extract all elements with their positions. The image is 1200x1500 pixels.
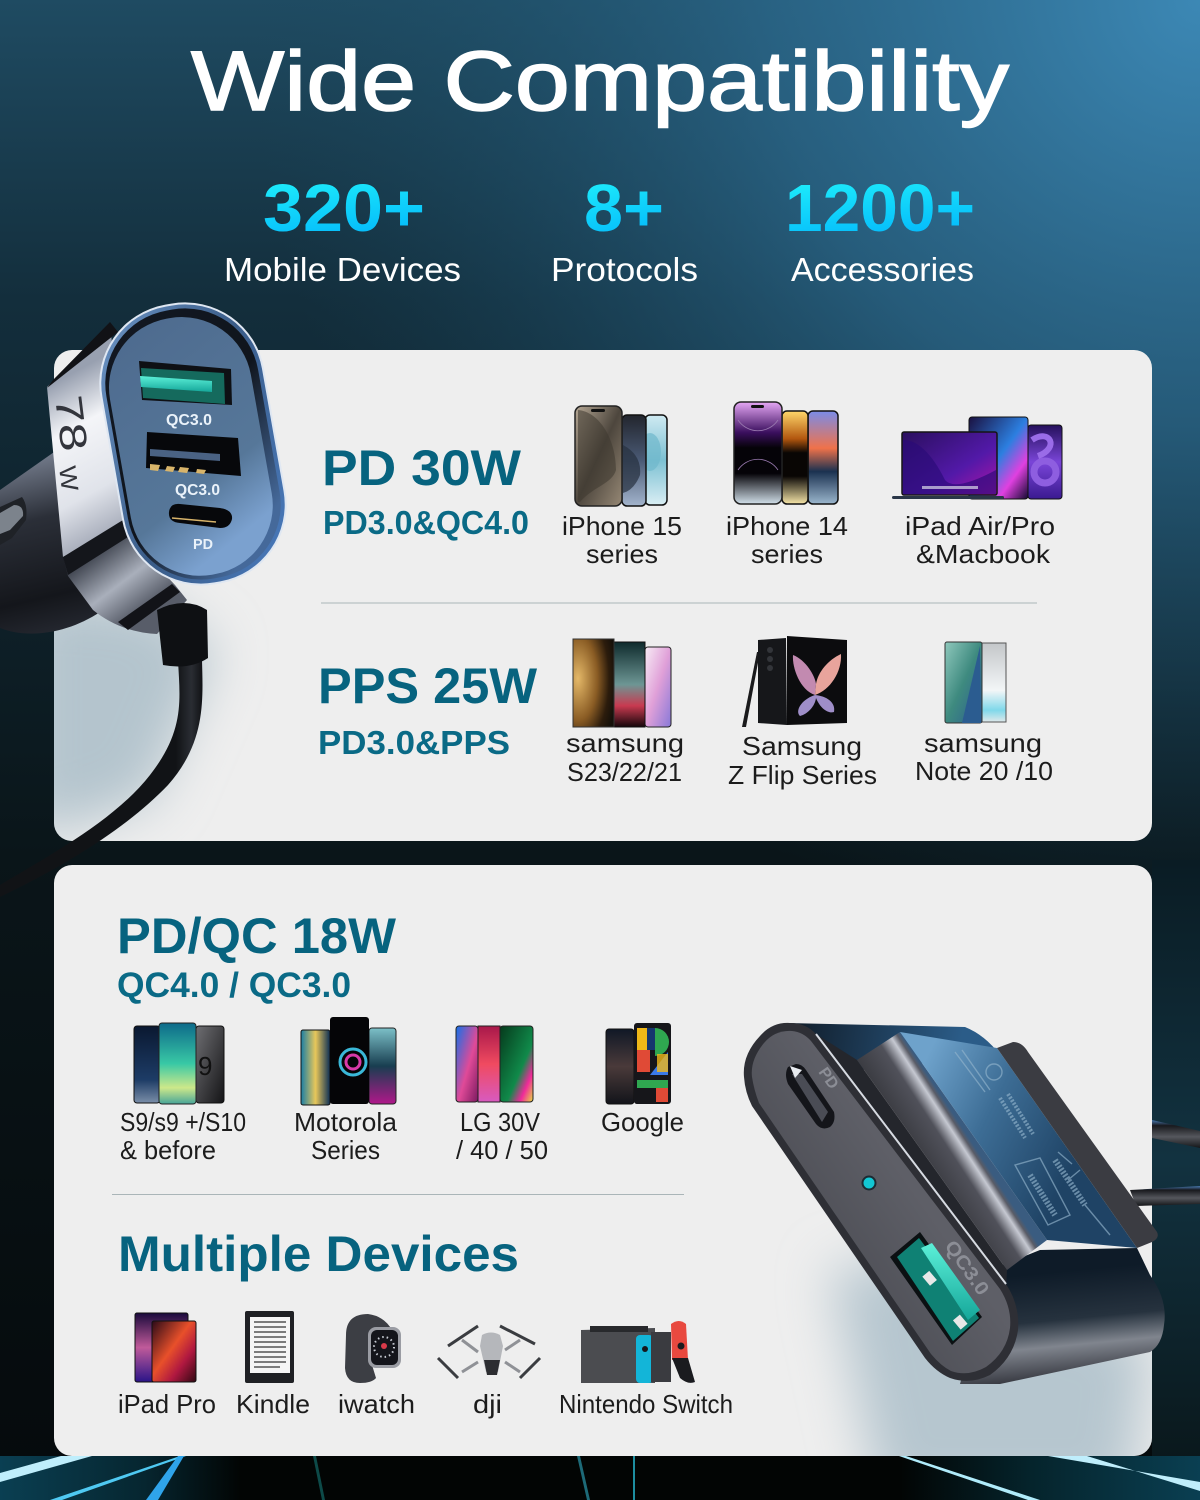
charger face: [87, 290, 299, 598]
device: Nintendo Switch: [559, 1321, 733, 1419]
charger wattage mark: 78: [46, 393, 95, 454]
device: iPad and Macbook: &Macbook: [916, 539, 1051, 569]
heading: PPS 25W: PPS 25W: [318, 658, 538, 714]
port: QC3.0 teal: [139, 361, 232, 429]
device: samsung Note 20 / 10: [915, 642, 1053, 786]
device: Google Pixel: [601, 1023, 684, 1137]
device: Kindle: Kindle: [236, 1389, 310, 1419]
device: iPad Pro: [118, 1313, 216, 1419]
cables: hub lead: [1130, 1120, 1200, 1206]
heading: PD 30W: PD3.0&QC4.0: [323, 504, 529, 541]
port: QC3.0 dark: [146, 432, 241, 499]
stat: protocols: 8+: [584, 171, 664, 246]
device: Samsung Z Flip Series: Z Flip Series: [728, 760, 877, 790]
device: iPad and Macbook: [892, 417, 1062, 569]
heading: PPS 25W: PD3.0&PPS: [318, 724, 510, 761]
heading: PD 30W: PD 30W: [322, 440, 522, 496]
heading: PD/QC 18W: PD/QC 18W: [117, 908, 397, 964]
device: LG V series: LG 30V: [460, 1107, 541, 1137]
device: Samsung Z Flip Series: Samsung: [742, 731, 862, 761]
stat: mobile devices: [224, 171, 461, 288]
device: Kindle: [236, 1311, 310, 1419]
heading: PD/QC 18W: QC4.0 / QC3.0: [117, 966, 351, 1005]
device: samsung S23/22/21: samsung: [566, 728, 684, 758]
device: samsung S23/22/21: S23/22/21: [567, 757, 682, 787]
heading: Multiple Devices: Multiple Devices: [118, 1226, 519, 1282]
charger lower band: [64, 535, 187, 634]
device: Samsung S series: [120, 1023, 246, 1165]
device: Motorola Series: [294, 1017, 398, 1165]
hub front face: [744, 1023, 1018, 1381]
cable grommet: [157, 603, 208, 666]
device: iPad and Macbook: iPad Air/Pro: [905, 511, 1055, 541]
charger wattage mark: W: [53, 464, 83, 493]
hub port USB-C: [786, 1064, 841, 1128]
device: iPhone 14 series: iPhone 14: [726, 511, 848, 541]
device: samsung Note 20 / 10: samsung: [924, 728, 1042, 758]
device: Motorola Series: Series: [311, 1135, 380, 1165]
device: dji drone: dji: [473, 1389, 502, 1419]
device: dji drone: [438, 1326, 540, 1419]
device: Samsung S series: S9/s9 +/S10: [120, 1107, 246, 1137]
stats row: [224, 171, 975, 288]
device: Google Pixel: Google: [601, 1107, 684, 1137]
device: iPhone 15 series: iPhone 15: [562, 511, 682, 541]
stat: mobile devices: Mobile Devices: [224, 251, 461, 288]
device: samsung S23/22/21: [566, 639, 684, 787]
hub clip flap: [997, 1042, 1158, 1248]
device: iPad Pro: iPad Pro: [118, 1389, 216, 1419]
charger wattage mark: [46, 393, 95, 493]
port: USB-C PD: [169, 504, 232, 553]
stat: mobile devices: 320+: [263, 171, 425, 246]
hub clip grey: [857, 1032, 1047, 1270]
cable: car charger lead: [0, 660, 202, 897]
charger silver shell: [47, 327, 135, 557]
stat: protocols: Protocols: [551, 251, 698, 288]
title: Wide Compatibility: [191, 34, 1009, 128]
heading: PD/QC 18W: [117, 908, 397, 1005]
hub port USB-A teal: [890, 1232, 993, 1345]
device: iwatch: iwatch: [338, 1389, 415, 1419]
port: USB-C PD: PD: [193, 536, 213, 553]
stat: protocols: [551, 171, 698, 288]
device: LG V series: [456, 1026, 548, 1165]
hub status LED: [862, 1176, 876, 1190]
device: iPhone 14 series: [726, 402, 848, 569]
back seat hub charger: [744, 1023, 1165, 1384]
stat: accessories: 1200+: [785, 171, 975, 246]
heading: PD 30W: [322, 440, 529, 541]
car charger: [0, 290, 299, 666]
hub groove: [816, 1034, 1007, 1290]
hub clip blue: [900, 1032, 1137, 1248]
hub top: [787, 1023, 1000, 1070]
device: Samsung Z Flip Series: [728, 636, 877, 790]
device: iPhone 14 series: series: [751, 539, 823, 569]
port: QC3.0 dark: QC3.0: [175, 482, 220, 499]
hub rear body: [960, 1248, 1165, 1384]
charger barrel: [0, 450, 100, 634]
port: QC3.0 teal: QC3.0: [166, 412, 212, 429]
panel: QC and multiple devices: [54, 865, 1152, 1500]
device: Samsung S series: & before: [120, 1135, 216, 1165]
hub port USB-C: PD: [815, 1065, 841, 1093]
device: samsung Note 20 / 10: Note 20 /10: [915, 756, 1053, 786]
device: iPhone 15 series: series: [586, 539, 658, 569]
device: Nintendo Switch: Nintendo Switch: [559, 1389, 733, 1419]
device: Samsung S series: 9: [198, 1051, 212, 1081]
hub port USB-A teal: QC3.0: [940, 1237, 993, 1300]
device: iPhone 15 series: [562, 406, 682, 569]
stat: accessories: [785, 171, 975, 288]
panel: PD and PPS fast charging: [20, 350, 1152, 841]
device: LG V series: / 40 / 50: [456, 1135, 548, 1165]
device: Motorola Series: Motorola: [294, 1107, 398, 1137]
heading: PPS 25W: [318, 658, 538, 761]
device: iwatch: [338, 1314, 415, 1419]
stat: accessories: Accessories: [791, 251, 974, 288]
